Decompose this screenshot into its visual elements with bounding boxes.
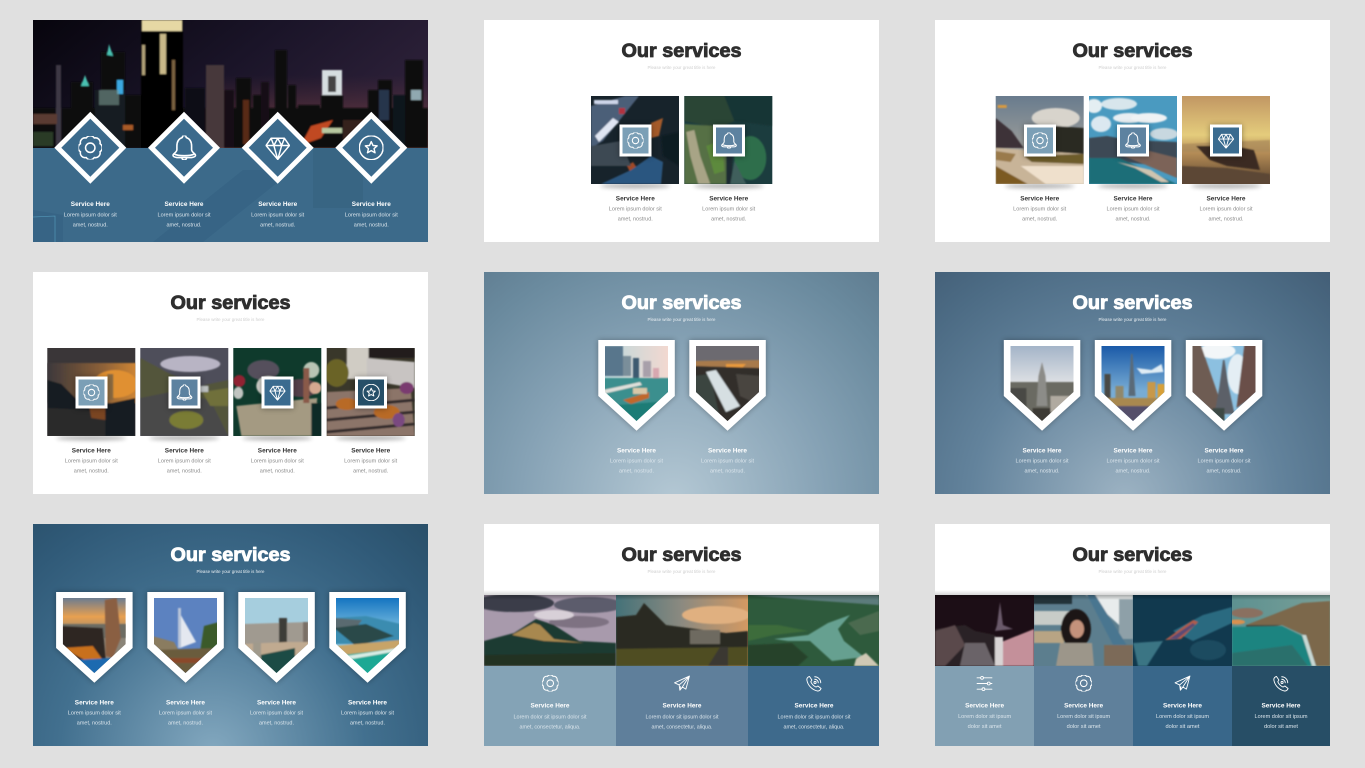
service text 3: amet, nostrud. bbox=[260, 222, 295, 228]
panel: slide 7 four shields bbox=[33, 524, 428, 746]
text: amet, nostrud. bbox=[353, 468, 388, 474]
text: Lorem ipsum dolor sit bbox=[1013, 206, 1067, 212]
text: amet, nostrud. bbox=[1116, 468, 1150, 474]
text: amet, nostrud. bbox=[168, 720, 203, 726]
card: service 3 bbox=[1186, 340, 1262, 474]
band bbox=[748, 666, 879, 746]
card: service 1 bbox=[1004, 340, 1080, 474]
text bbox=[1016, 448, 1069, 474]
service text 2 bbox=[158, 201, 211, 228]
band bbox=[1232, 666, 1330, 746]
photo: night riverside bbox=[935, 595, 1034, 666]
text: Lorem dolor sit ipsum bbox=[1156, 714, 1210, 720]
service text 2: Service Here bbox=[164, 201, 204, 208]
text: Lorem ipsum dolor sit bbox=[1016, 458, 1069, 464]
photo: volcano under clouds bbox=[484, 595, 616, 666]
text: amet, nostrud. bbox=[711, 216, 746, 222]
service text 4: amet, nostrud. bbox=[354, 222, 389, 228]
service text 4: Lorem ipsum dolor sit bbox=[345, 212, 398, 218]
text: Service Here bbox=[75, 700, 114, 706]
icon: gear bbox=[542, 675, 559, 692]
heading: Our services bbox=[622, 41, 742, 62]
text: amet, nostrud. bbox=[260, 468, 295, 474]
text: Lorem ipsum dolor sit bbox=[341, 710, 395, 716]
text: dolor sit amet bbox=[1067, 724, 1101, 730]
text bbox=[250, 700, 304, 726]
text: Lorem ipsum dolor sit bbox=[158, 458, 211, 464]
photo: city sunset bbox=[47, 348, 136, 436]
text bbox=[1156, 702, 1210, 730]
text: Service Here bbox=[258, 448, 297, 454]
icon box: bell bbox=[1117, 124, 1149, 157]
text: Service Here bbox=[616, 196, 655, 202]
card: service 3 bbox=[228, 343, 326, 474]
column: service 1 bbox=[930, 590, 1039, 746]
text bbox=[1254, 702, 1308, 730]
shield frame bbox=[689, 340, 766, 431]
icon: sliders bbox=[977, 676, 992, 691]
service text 4: Service Here bbox=[352, 201, 391, 208]
text: Lorem dolor sit ipsum bbox=[1254, 714, 1308, 720]
panel: slide 5 two shields bbox=[484, 272, 879, 494]
card: service 2 bbox=[679, 91, 777, 222]
heading bbox=[622, 293, 742, 322]
card: service 2 bbox=[135, 343, 233, 474]
heading: Please write your great title is here bbox=[196, 569, 265, 574]
photo: empire state skyline bbox=[1008, 346, 1076, 423]
heading bbox=[622, 41, 742, 70]
service text 3: Service Here bbox=[258, 201, 298, 208]
text: Lorem ipsum dolor sit bbox=[344, 458, 398, 464]
text: Service Here bbox=[1163, 702, 1202, 709]
text: Service Here bbox=[662, 703, 702, 710]
slide background bbox=[484, 272, 879, 494]
text: Service Here bbox=[1020, 196, 1060, 202]
photo: aerial forest bbox=[684, 96, 772, 184]
slide background bbox=[33, 272, 428, 494]
service text 2: Lorem ipsum dolor sit bbox=[158, 212, 211, 218]
shield frame bbox=[1095, 340, 1171, 431]
icon box: gem bbox=[262, 376, 294, 409]
card: service 2 bbox=[1084, 91, 1182, 222]
top shadow on photo strip bbox=[935, 595, 1330, 600]
text bbox=[68, 700, 121, 726]
heading bbox=[170, 293, 290, 322]
card: service 4 bbox=[329, 592, 406, 726]
text bbox=[1106, 448, 1160, 474]
shield frame bbox=[56, 592, 133, 683]
panel: slide 6 three shields bbox=[935, 272, 1330, 494]
text: Service Here bbox=[1064, 702, 1103, 709]
text bbox=[251, 448, 304, 474]
heading: Please write your great title is here bbox=[648, 317, 716, 322]
icon: plane bbox=[675, 676, 689, 690]
text bbox=[702, 196, 756, 222]
heading: Our services bbox=[1072, 545, 1192, 566]
slide background bbox=[484, 20, 879, 242]
photo: eiffel tower street bbox=[1192, 346, 1256, 421]
text: amet, nostrud. bbox=[1022, 216, 1057, 222]
text bbox=[1057, 702, 1111, 730]
service text 1: Lorem ipsum dolor sit bbox=[64, 212, 117, 218]
text: Service Here bbox=[617, 448, 656, 454]
photo: woman on stairs bbox=[1034, 595, 1133, 666]
panel: slide 3 three square photos bbox=[935, 20, 1330, 242]
photo: dubai downtown bbox=[1100, 346, 1166, 423]
text: Lorem dolor sit ipsum dolor sit bbox=[514, 714, 587, 720]
photo: city and clouds bbox=[1089, 96, 1177, 184]
text: amet, nostrud. bbox=[74, 468, 109, 474]
text: Lorem ipsum dolor sit bbox=[702, 206, 756, 212]
text: Lorem dolor sit ipsum bbox=[1057, 714, 1111, 720]
text: Lorem dolor sit ipsum dolor sit bbox=[778, 714, 851, 720]
photo: boat from above bbox=[1133, 595, 1232, 666]
text: dolor sit amet bbox=[1264, 724, 1299, 730]
column: service 4 bbox=[1227, 590, 1335, 746]
top shadow on photo strip bbox=[484, 595, 879, 600]
text: Service Here bbox=[708, 448, 747, 454]
text bbox=[1013, 196, 1067, 222]
text: Service Here bbox=[1114, 196, 1153, 202]
column: service 2 bbox=[611, 590, 753, 746]
heading: Please write your great title is here bbox=[648, 65, 716, 70]
service text 1: amet, nostrud. bbox=[73, 222, 108, 228]
heading: Our services bbox=[170, 293, 290, 314]
text: Lorem ipsum dolor sit bbox=[1106, 206, 1160, 212]
text bbox=[646, 703, 719, 730]
photo: aerial street bbox=[591, 96, 679, 184]
column: service 3 bbox=[743, 590, 884, 746]
text: Service Here bbox=[530, 703, 570, 710]
text: Lorem ipsum dolor sit bbox=[251, 458, 304, 464]
icon box: gem bbox=[1210, 124, 1242, 157]
photo: palm beach bbox=[334, 598, 401, 675]
lower blue band bbox=[33, 148, 428, 242]
text: Service Here bbox=[965, 702, 1004, 709]
text: Lorem ipsum dolor sit bbox=[68, 710, 121, 716]
heading: Our services bbox=[622, 545, 742, 566]
slide background bbox=[935, 524, 1330, 746]
service text 2: amet, nostrud. bbox=[166, 222, 202, 228]
card: service 2 bbox=[1095, 340, 1171, 474]
text: amet, nostrud. bbox=[710, 468, 745, 474]
photo: marina with boat bbox=[603, 346, 670, 423]
text bbox=[158, 448, 211, 474]
shield frame bbox=[329, 592, 406, 683]
shadow above photo strip bbox=[935, 590, 1330, 595]
icon diamond: bell bbox=[148, 112, 220, 184]
text: amet, nostrud. bbox=[350, 720, 385, 726]
text bbox=[609, 196, 662, 222]
text: amet, nostrud. bbox=[1116, 216, 1150, 222]
band bbox=[935, 666, 1034, 746]
text: Lorem dolor sit ipsum dolor sit bbox=[646, 714, 719, 720]
icon diamond: gear bbox=[54, 112, 126, 184]
column: service 3 bbox=[1128, 590, 1237, 746]
heading: Please write your great title is here bbox=[196, 317, 265, 322]
text: amet, nostrud. bbox=[619, 468, 654, 474]
heading bbox=[170, 545, 290, 574]
shield frame bbox=[1186, 340, 1262, 431]
slide background bbox=[935, 20, 1330, 242]
icon: phone bbox=[807, 676, 821, 691]
text: Lorem ipsum dolor sit bbox=[609, 206, 662, 212]
icon: plane bbox=[1175, 676, 1190, 690]
text: Service Here bbox=[709, 196, 749, 202]
photo: mountain lake bbox=[996, 96, 1084, 184]
text bbox=[65, 448, 118, 474]
text: Service Here bbox=[257, 700, 296, 706]
text: amet, nostrud. bbox=[1024, 468, 1060, 474]
text: amet, nostrud. bbox=[259, 720, 294, 726]
text: amet, nostrud. bbox=[167, 468, 202, 474]
shield frame bbox=[147, 592, 224, 683]
text bbox=[341, 700, 395, 726]
card: service 1 bbox=[991, 91, 1089, 222]
text: Lorem dolor sit ipsum bbox=[958, 714, 1012, 720]
heading: Our services bbox=[622, 293, 742, 314]
photo: waterfall at sunset bbox=[694, 346, 761, 423]
text: Service Here bbox=[348, 700, 387, 706]
slide background bbox=[484, 524, 879, 746]
text bbox=[514, 703, 587, 730]
text: Service Here bbox=[1262, 702, 1301, 709]
shield frame bbox=[238, 592, 315, 683]
text: Service Here bbox=[72, 448, 111, 454]
heading: Please write your great title is here bbox=[648, 569, 716, 574]
photo: river valley bbox=[748, 595, 879, 666]
icon box: star bbox=[355, 376, 387, 409]
card: service 2 bbox=[147, 592, 224, 726]
text: Lorem ipsum dolor sit bbox=[610, 458, 664, 464]
card: service 1 bbox=[56, 592, 133, 726]
photo: dubai marina bbox=[243, 598, 310, 675]
shadow above photo strip bbox=[484, 590, 879, 595]
heading: Please write your great title is here bbox=[1098, 317, 1167, 322]
text: amet, consectetur, aliqua. bbox=[652, 724, 712, 730]
icon box: gear bbox=[620, 124, 652, 157]
text: Service Here bbox=[794, 703, 834, 710]
card: service 4 bbox=[322, 343, 420, 474]
text: Service Here bbox=[351, 448, 391, 454]
photo: flower basket bbox=[233, 348, 322, 436]
photo: railway and town bbox=[616, 595, 748, 666]
band bbox=[616, 666, 748, 746]
icon box: bell bbox=[713, 124, 745, 157]
photo: wrecked boat at dusk bbox=[1182, 96, 1270, 184]
text bbox=[958, 702, 1012, 730]
service text 1: Service Here bbox=[71, 201, 110, 208]
text bbox=[701, 448, 755, 474]
heading bbox=[1072, 41, 1192, 70]
slide background bbox=[33, 524, 428, 746]
card: service 3 bbox=[1177, 91, 1275, 222]
panel: slide 4 four square photos bbox=[33, 272, 428, 494]
text: Service Here bbox=[1022, 448, 1062, 454]
text: Service Here bbox=[1204, 448, 1244, 454]
photo: burj al arab bbox=[152, 598, 219, 675]
text: dolor sit amet bbox=[968, 724, 1002, 730]
panel: slide 9 four photo columns bbox=[930, 524, 1335, 746]
text bbox=[1200, 196, 1253, 222]
text: amet, consectetur, aliqua. bbox=[520, 724, 580, 730]
heading: Our services bbox=[1072, 41, 1192, 62]
icon: gear bbox=[1075, 675, 1092, 692]
photo: moorland bbox=[140, 348, 228, 436]
text: Service Here bbox=[166, 700, 205, 706]
band bbox=[1034, 666, 1133, 746]
heading: Please write your great title is here bbox=[1098, 569, 1167, 574]
icon diamond: star bbox=[335, 112, 407, 184]
text bbox=[159, 700, 213, 726]
icon box: gear bbox=[76, 376, 108, 409]
icon: phone bbox=[1274, 676, 1288, 691]
slide background bbox=[935, 272, 1330, 494]
text: amet, nostrud. bbox=[1206, 468, 1242, 474]
photo: coast cliffs bbox=[1232, 595, 1330, 666]
heading: Please write your great title is here bbox=[1098, 65, 1167, 70]
heading bbox=[622, 545, 742, 574]
text: Lorem ipsum dolor sit bbox=[1106, 458, 1160, 464]
photo: night city skyline bbox=[33, 20, 428, 148]
heading bbox=[1072, 545, 1192, 574]
text: Lorem ipsum dolor sit bbox=[65, 458, 118, 464]
service text 3: Lorem ipsum dolor sit bbox=[251, 212, 305, 218]
photo: pastries on cloth bbox=[326, 348, 415, 436]
text bbox=[1106, 196, 1160, 222]
service text 1 bbox=[64, 201, 117, 228]
heading bbox=[1072, 293, 1192, 322]
heading: Our services bbox=[170, 545, 290, 566]
text: amet, nostrud. bbox=[618, 216, 653, 222]
text: Lorem ipsum dolor sit bbox=[159, 710, 213, 716]
card: service 3 bbox=[238, 592, 315, 726]
panel: slide 1 city with diamonds bbox=[33, 20, 428, 242]
icon diamond: gem bbox=[242, 112, 314, 184]
text: Lorem ipsum dolor sit bbox=[1200, 206, 1253, 212]
text: amet, nostrud. bbox=[1208, 216, 1244, 222]
service text 3 bbox=[251, 201, 305, 228]
icon box: gear bbox=[1024, 124, 1056, 157]
panel: slide 2 two square photos bbox=[484, 20, 879, 242]
card: service 1 bbox=[42, 343, 140, 474]
card: service 1 bbox=[598, 340, 675, 474]
band bbox=[1133, 666, 1232, 746]
text: amet, consectetur, aliqua. bbox=[784, 724, 844, 730]
text: dolor sit amet bbox=[1166, 724, 1200, 730]
heading: Our services bbox=[1072, 293, 1192, 314]
text: amet, nostrud. bbox=[77, 720, 112, 726]
text: Lorem ipsum dolor sit bbox=[701, 458, 755, 464]
text bbox=[610, 448, 664, 474]
text: Service Here bbox=[165, 448, 204, 454]
icon box: bell bbox=[168, 376, 200, 409]
text: Lorem ipsum dolor sit bbox=[1198, 458, 1251, 464]
text bbox=[344, 448, 398, 474]
text: Service Here bbox=[1114, 448, 1153, 454]
panel: slide 8 three photo columns bbox=[474, 524, 884, 746]
service text 4 bbox=[345, 201, 398, 228]
shield frame bbox=[1004, 340, 1080, 431]
column: service 2 bbox=[1029, 590, 1138, 746]
text: Lorem ipsum dolor sit bbox=[250, 710, 304, 716]
band bbox=[484, 666, 616, 746]
card: service 1 bbox=[586, 91, 684, 222]
text bbox=[778, 703, 851, 730]
text: Service Here bbox=[1206, 196, 1246, 202]
card: service 2 bbox=[689, 340, 766, 474]
text bbox=[1198, 448, 1251, 474]
column: service 1 bbox=[474, 590, 624, 746]
shield frame bbox=[598, 340, 675, 431]
photo: marina towers at sunset bbox=[61, 598, 128, 675]
